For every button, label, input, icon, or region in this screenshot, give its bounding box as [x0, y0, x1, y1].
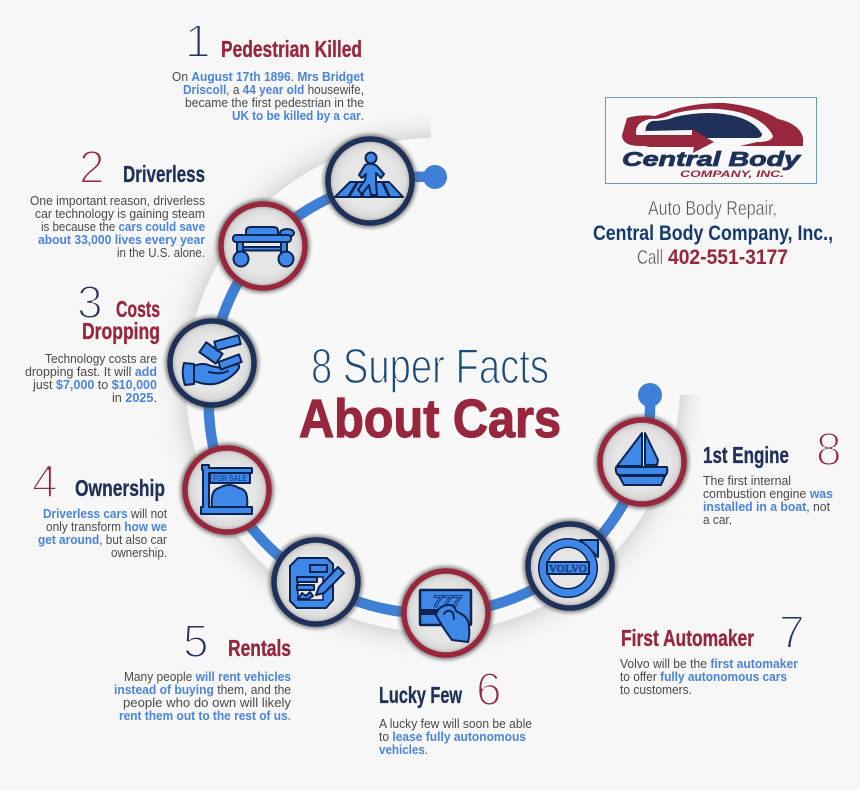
fact 1: became the first pedestrian in the: [185, 96, 364, 110]
fact 5: instead of buying them, and the: [114, 683, 291, 697]
fact 5: 5: [183, 615, 209, 667]
fact 3: 3: [77, 276, 103, 328]
logo sub-wordmark: COMPANY, INC.: [680, 169, 784, 180]
fact 6: Lucky Few: [379, 682, 462, 708]
fact 7: First Automaker: [621, 625, 754, 651]
fact 7: 7: [779, 606, 805, 658]
fact 7: [620, 606, 805, 697]
fact 1: 1: [185, 15, 211, 67]
fact 4: [32, 455, 167, 560]
fact 4: 4: [32, 455, 58, 507]
fact 2: 2: [79, 141, 105, 193]
fact 5: [114, 615, 292, 723]
fact 3: in 2025.: [112, 391, 157, 405]
badge 1: pedestrian crossing: [323, 134, 417, 228]
fact 2: Driverless: [123, 161, 205, 187]
fact 1: [172, 15, 365, 123]
contact text: [593, 198, 833, 269]
fact 7: to customers.: [620, 683, 692, 697]
fact 3: dropping fast. It will add: [25, 365, 157, 379]
fact 8: a car.: [703, 513, 732, 527]
main title: 8 Super Facts: [311, 340, 549, 394]
fact 2: [30, 141, 205, 260]
fact 8: The first internal: [703, 474, 791, 488]
fact 8: combustion engine was: [703, 487, 833, 501]
fact 1: Pedestrian Killed: [221, 36, 362, 62]
fact 5: Many people will rent vehicles: [124, 670, 291, 684]
fact 6: vehicles.: [379, 743, 428, 757]
badge 8: sailboat: [595, 415, 689, 509]
fact 2: One important reason, driverless: [30, 194, 205, 208]
badge 5: signing document: [269, 535, 363, 629]
logo wordmark: Central Body: [622, 149, 801, 171]
label: VOLVO: VOLVO: [549, 564, 587, 575]
badge 4: car for sale: [180, 443, 274, 537]
fact 6: A lucky few will soon be able: [379, 717, 532, 731]
fact 4: Driverless cars will not: [43, 507, 167, 521]
fact 1: On August 17th 1896. Mrs Bridget: [172, 70, 365, 84]
fact 6: 6: [476, 663, 502, 715]
icon: contract and pen: [290, 558, 344, 608]
label: 777: 777: [433, 592, 463, 611]
icon: pedestrian crossing: [335, 152, 403, 197]
fact 4: ownership.: [111, 546, 167, 560]
fact 1: UK to be killed by a car.: [232, 109, 364, 123]
icon: sailboat: [616, 433, 667, 485]
fact 5: rent them out to the rest of us.: [119, 709, 291, 723]
fact 2: is because the cars could save: [41, 220, 205, 234]
fact 3: Technology costs are: [45, 352, 157, 366]
fact 4: get around, but also car: [38, 533, 167, 547]
contact text: 402-551-3177: [668, 246, 788, 269]
icon: hand with money: [183, 335, 242, 385]
fact 2: about 33,000 lives every year: [38, 233, 205, 247]
fact 6: to lease fully autonomous: [379, 730, 526, 744]
main title: [299, 340, 561, 449]
fact 8: installed in a boat, not: [703, 500, 831, 514]
fact 5: people who do own will likely: [123, 696, 292, 710]
fact 6: [379, 663, 532, 757]
fact 8: [703, 423, 842, 527]
badge 2: stretcher: [216, 199, 310, 293]
contact text: Call: [637, 247, 663, 269]
badge 3: hand with money: [165, 316, 259, 410]
fact 8: 1st Engine: [703, 442, 789, 468]
badge 7: Volvo: [523, 519, 617, 613]
label: for sale: FOR SALE: [213, 474, 248, 483]
fact 3: Costs: [116, 296, 160, 322]
logo: Central Body Company: [606, 98, 816, 184]
icon: stretcher: [233, 227, 294, 266]
main title: About Cars: [299, 389, 561, 449]
badge 6: 777 card: [399, 566, 493, 660]
fact 3: just $7,000 to $10,000: [32, 378, 157, 392]
fact 1: Driscoll, a 44 year old housewife,: [183, 83, 364, 97]
fact 7: Volvo will be the first automaker: [620, 657, 798, 671]
curved shadow disc: [184, 136, 682, 634]
fact 5: Rentals: [228, 635, 291, 661]
timeline arc: [209, 165, 662, 614]
fact 8: 8: [816, 423, 842, 475]
contact text: Auto Body Repair,: [648, 198, 777, 220]
fact 4: Ownership: [75, 475, 165, 501]
fact 3: Dropping: [82, 318, 160, 344]
fact 7: to offer fully autonomous cars: [620, 670, 787, 684]
fact 3: [25, 276, 160, 405]
fact 2: car technology is gaining steam: [35, 207, 205, 221]
fact 4: only transform how we: [46, 520, 167, 534]
fact 2: in the U.S. alone.: [117, 246, 205, 260]
